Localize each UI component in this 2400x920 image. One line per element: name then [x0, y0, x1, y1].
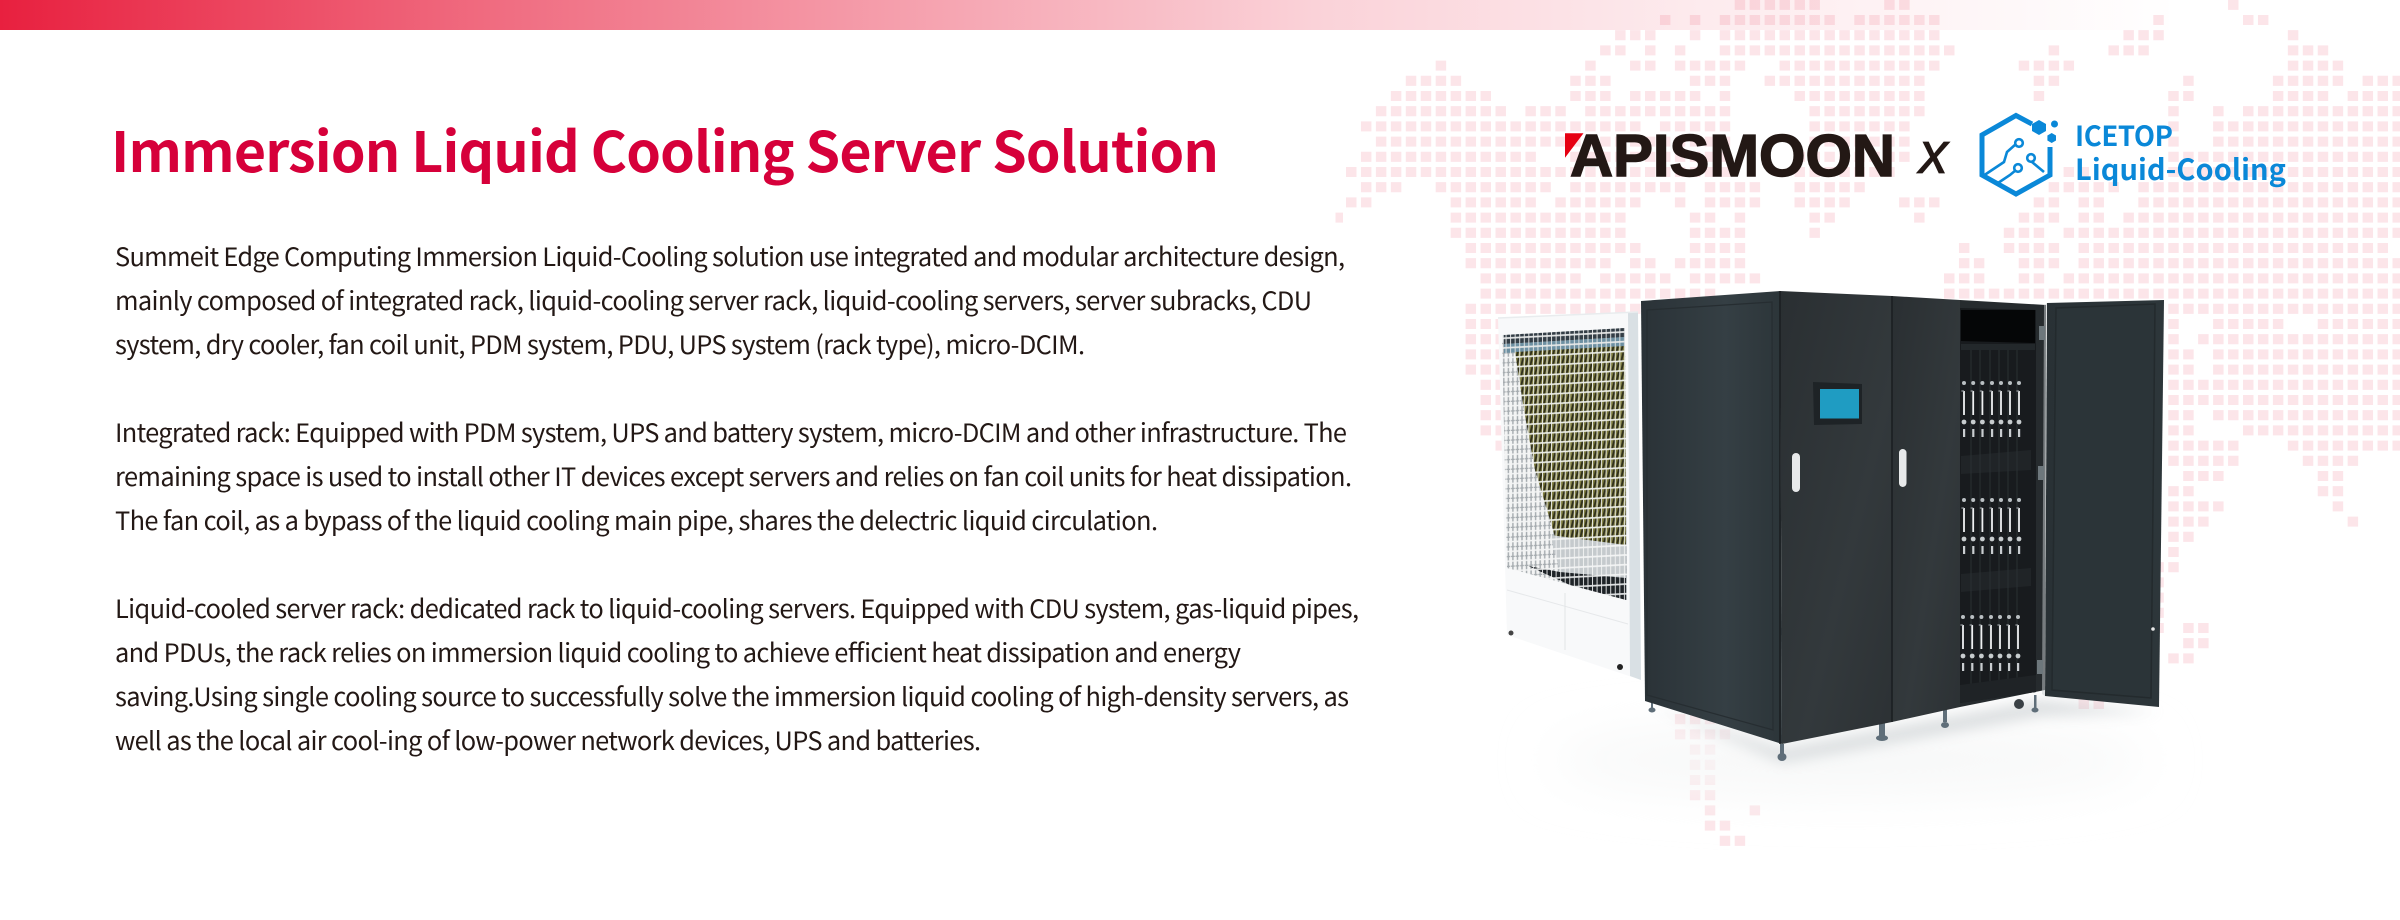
text block: liquid-cooled server rack paragraph: Liquid-cooled server rack: dedicated rack to liquid-cooling servers. Equipped with CDU system, gas-liquid pipes,	[115, 590, 1359, 626]
text block: integrated rack paragraph	[115, 414, 1352, 538]
title: Immersion Liquid Cooling Server Solution	[111, 108, 1219, 188]
text block: overview paragraph: mainly composed of integrated rack, liquid-cooling server rack, liquid-cooling servers, server subracks, CDU	[115, 282, 1312, 318]
grille	[1502, 328, 1627, 600]
text block: liquid-cooled server rack paragraph: saving.Using single cooling source to successfully solve the immersion liquid cooling of high-density servers, as	[115, 678, 1349, 714]
door hinges	[2037, 326, 2045, 674]
top gradient bar	[0, 0, 2400, 30]
text block: liquid-cooled server rack paragraph: well as the local air cool-ing of low-power network devices, UPS and batteries.	[115, 722, 981, 758]
floor shadow	[1550, 730, 2150, 790]
open door	[2042, 300, 2164, 707]
logo: Icetop Liquid-Cooling: ICETOP	[2075, 114, 2173, 154]
icon: hexagon circuit	[1982, 116, 2058, 194]
text block: integrated rack paragraph: remaining space is used to install other IT devices except servers and relies on fan coil units for heat dissipation.	[115, 458, 1352, 494]
logo: Apismoon: APISMOON	[1570, 123, 1895, 189]
text block: overview paragraph	[115, 238, 1345, 362]
text block: overview paragraph: system, dry cooler, fan coil unit, PDM system, PDU, UPS system (rack type), micro-DCIM.	[115, 326, 1085, 362]
server bay	[1960, 300, 2046, 707]
separator x: x	[1916, 121, 1950, 186]
text block: integrated rack paragraph: The fan coil, as a bypass of the liquid cooling main pipe, shares the delectric liquid circulation.	[115, 502, 1158, 538]
text block: liquid-cooled server rack paragraph	[115, 590, 1359, 758]
text block: liquid-cooled server rack paragraph: and PDUs, the rack relies on immersion liquid cooling to achieve efficient heat dissipation and energy	[115, 634, 1241, 670]
logo: Icetop Liquid-Cooling	[1982, 114, 2286, 194]
dry cooler	[1498, 312, 1641, 680]
text block: integrated rack paragraph: Integrated rack: Equipped with PDM system, UPS and battery system, micro-DCIM and other infrastructure. The	[115, 414, 1347, 450]
cabinet side	[1641, 291, 1782, 744]
touch screen	[1813, 382, 1862, 425]
text block: overview paragraph: Summeit Edge Computing Immersion Liquid-Cooling solution use integrated and modular architecture design,	[115, 238, 1345, 274]
dotted world map background	[1336, 5, 2400, 841]
door handles	[1792, 453, 1800, 492]
logo: Icetop Liquid-Cooling: Liquid-Cooling	[2075, 147, 2286, 189]
cabinet front left door	[1780, 291, 1892, 744]
server handles	[1961, 381, 2021, 437]
product: liquid cooling rack and dry cooler	[1498, 291, 2164, 790]
feet	[1648, 695, 2038, 761]
cabinet front right door	[1892, 296, 1960, 722]
